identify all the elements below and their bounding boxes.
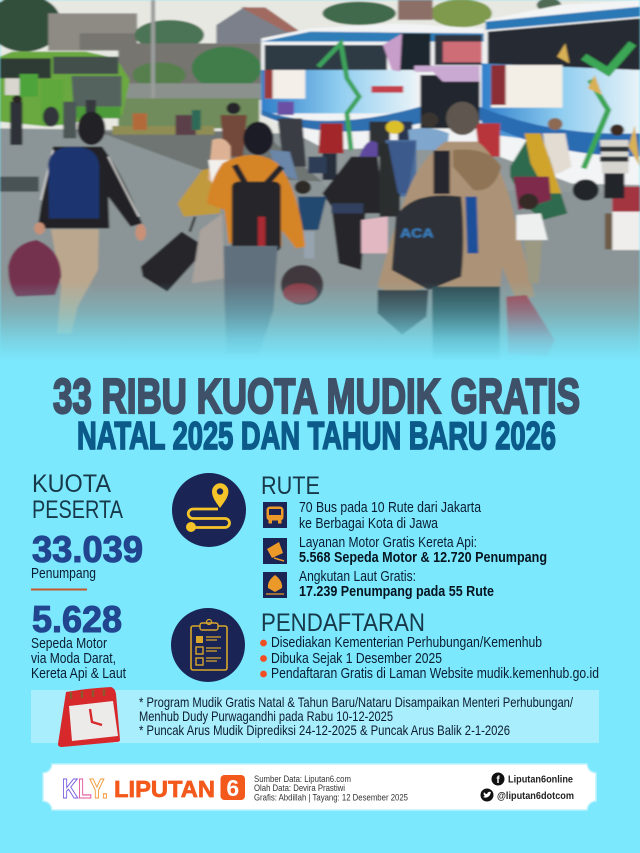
person: orange hoodie with black backpack <box>207 122 323 353</box>
stat: passengers: 33.039 <box>32 529 143 570</box>
bullet list <box>260 634 599 682</box>
icon: calendar <box>58 687 120 747</box>
heading: pendaftaran: PENDAFTARAN <box>261 609 425 637</box>
middle bus <box>261 23 484 150</box>
text: sea transport: 17.239 Penumpang pada 55 Rute <box>299 583 494 600</box>
panel: notes <box>31 687 599 747</box>
background crowd <box>10 95 629 220</box>
text: credits <box>254 774 408 802</box>
text: notes: * Puncak Arus Mudik Diprediksi 24-12-2025 & Puncak Arus Balik 2-1-2026 <box>139 722 510 738</box>
icon: train <box>263 538 287 564</box>
panel: kuota peserta <box>31 470 143 682</box>
panel: rute <box>261 472 547 600</box>
green bus <box>0 52 130 127</box>
stat: motorcycles: Sepeda Motor <box>31 635 107 652</box>
title <box>53 370 580 458</box>
stat: motorcycles: Kereta Api & Laut <box>31 665 127 682</box>
heading: kuota peserta: KUOTA <box>32 470 111 498</box>
person: dark jacket woman and child <box>269 141 416 270</box>
trees and buildings <box>0 0 561 128</box>
person: suitcase and child carrier <box>141 138 231 292</box>
text: notes: Menhub Dudy Purwagandhi pada Rabu 10-12-2025 <box>139 708 393 724</box>
heading: kuota peserta <box>32 470 123 524</box>
stat: motorcycles: 5.628 <box>32 599 122 640</box>
bullet list: Dibuka Sejak 1 Desember 2025 <box>271 650 442 667</box>
stat: motorcycles: via Moda Darat, <box>31 650 116 667</box>
icon: bus <box>263 502 287 528</box>
panel: footer <box>43 764 596 810</box>
text: train service <box>299 534 547 566</box>
text: sea transport: Angkutan Laut Gratis: <box>299 568 416 585</box>
text: bus routes: ke Berbagai Kota di Jawa <box>299 515 439 532</box>
text: bus routes <box>299 499 482 532</box>
right bus <box>480 0 640 201</box>
bullet list: Disediakan Kementerian Perhubungan/Kemenhub <box>271 634 542 651</box>
person: walking man with blue backpack <box>8 112 146 333</box>
social: twitter <box>480 788 574 802</box>
text: credits: Grafis: Abdillah | Tayang: 12 Desember 2025 <box>254 792 408 802</box>
text: train service: Layanan Motor Gratis Kereta Api: <box>299 534 477 551</box>
person: big man with ACA bag: ACA <box>400 226 434 240</box>
panel: pendaftaran <box>260 609 599 682</box>
sign board <box>605 187 640 250</box>
heading: rute: RUTE <box>261 472 320 500</box>
text: sea transport <box>299 568 494 600</box>
heading: kuota peserta: PESERTA <box>32 496 123 524</box>
social: twitter: @liputan6dotcom <box>497 791 574 802</box>
road <box>0 128 640 322</box>
social: facebook: Liputan6online <box>508 774 573 786</box>
icon: clipboard checklist <box>171 608 245 682</box>
text: train service: 5.568 Sepeda Motor & 12.720 Penumpang <box>299 549 547 566</box>
text: credits: Sumber Data: Liputan6.com <box>254 774 351 784</box>
logo: KLY: KLY. <box>62 773 108 804</box>
social: facebook: f <box>496 775 500 786</box>
icon: ship <box>263 572 287 598</box>
logo: Liputan 6: LIPUTAN <box>114 776 215 802</box>
icon: route pin <box>172 473 246 547</box>
photo fade into background <box>0 282 640 362</box>
social: facebook <box>492 772 573 786</box>
text: credits: Olah Data: Devira Prastiwi <box>254 783 345 793</box>
person: big man with ACA bag <box>378 102 555 360</box>
stat: passengers: Penumpang <box>31 565 96 582</box>
photo: travellers walking to buses <box>0 0 640 371</box>
text: bus routes: 70 Bus pada 10 Rute dari Jakarta <box>299 499 482 516</box>
text: notes <box>139 694 573 738</box>
stat: motorcycles <box>31 599 127 682</box>
logo: Liputan 6: 6 <box>226 775 239 801</box>
